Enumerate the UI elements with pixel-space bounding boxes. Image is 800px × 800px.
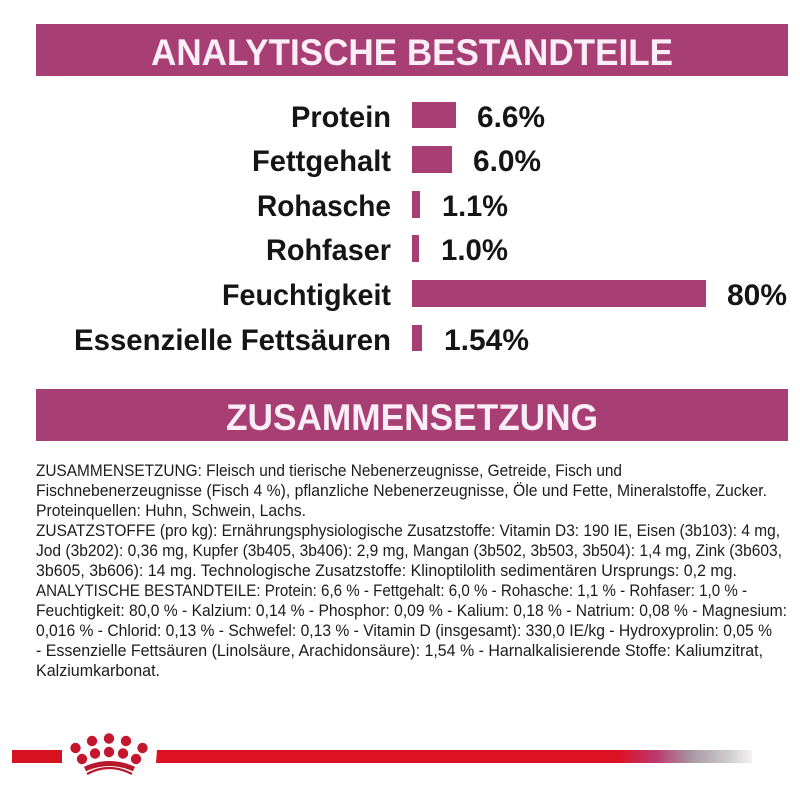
text block: composition details: Fischnebenerzeugnisse (Fisch 4 %), pflanzliche Nebenerzeugnisse, Öle und Fette, Mineralstoffe, Zucker. (36, 482, 767, 500)
row: Fettgehalt: 6.0% (473, 145, 541, 178)
row: Rohfaser: Rohfaser (266, 234, 391, 267)
row: Rohasche (257, 190, 508, 223)
bar chart: nutrient percentages (74, 101, 787, 357)
row: Essenzielle Fettsäuren: 1.54% (444, 324, 529, 357)
text block: composition details: 3b605, 3b606): 14 mg. Technologische Zusatzstoffe: Klinoptilolith sedimentären Ursprungs: 0,2 mg. (36, 562, 737, 580)
row: Feuchtigkeit: 80% (727, 279, 787, 312)
row: Feuchtigkeit (222, 279, 787, 312)
text block: composition details: - Essenzielle Fettsäuren (Linolsäure, Arachidonsäure): 1,54 % - Harnalkalisierende Stoffe: Kaliumzitrat, (36, 642, 763, 660)
text block: composition details: Kalziumkarbonat. (36, 662, 160, 680)
icon: crown logo (70, 733, 148, 774)
row: Feuchtigkeit: Feuchtigkeit (222, 279, 391, 312)
row: Protein: 6.6% (477, 101, 545, 134)
footer: red brand line with crown (12, 733, 752, 774)
heading band: Zusammensetzung: ZUSAMMENSETZUNG (226, 397, 598, 438)
row: Protein (291, 101, 545, 134)
right red bar fading to grey (156, 750, 752, 763)
row: Protein: Protein (291, 101, 391, 134)
row: Rohasche: 1.1% (442, 190, 508, 223)
row: Rohfaser: 1.0% (441, 234, 508, 267)
text block: composition details: Proteinquellen: Huhn, Schwein, Lachs. (36, 502, 306, 520)
row: Fettgehalt: Fettgehalt (252, 145, 391, 178)
row: Fettgehalt (252, 145, 541, 178)
row: Essenzielle Fettsäuren: Essenzielle Fettsäuren (74, 324, 391, 357)
heading band: Zusammensetzung (36, 389, 788, 441)
heading band: Analytische Bestandteile (36, 24, 788, 76)
heading band: Analytische Bestandteile: ANALYTISCHE BESTANDTEILE (151, 32, 673, 73)
row: Rohfaser (266, 234, 508, 267)
text block: composition details: 0,016 % - Chlorid: 0,13 % - Schwefel: 0,13 % - Vitamin D (insgesamt): 330,0 IE/kg - Hydroxyprolin: 0,05 % (36, 622, 772, 640)
left red bar (12, 750, 62, 763)
text block: composition details: ZUSAMMENSETZUNG: Fleisch und tierische Nebenerzeugnisse, Getreide, Fisch und (36, 462, 622, 480)
text block: composition details (36, 462, 787, 680)
text block: composition details: ANALYTISCHE BESTANDTEILE: Protein: 6,6 % - Fettgehalt: 6,0 % - Rohasche: 1,1 % - Rohfaser: 1,0 % - (36, 582, 747, 600)
row: Rohasche: Rohasche (257, 190, 391, 223)
